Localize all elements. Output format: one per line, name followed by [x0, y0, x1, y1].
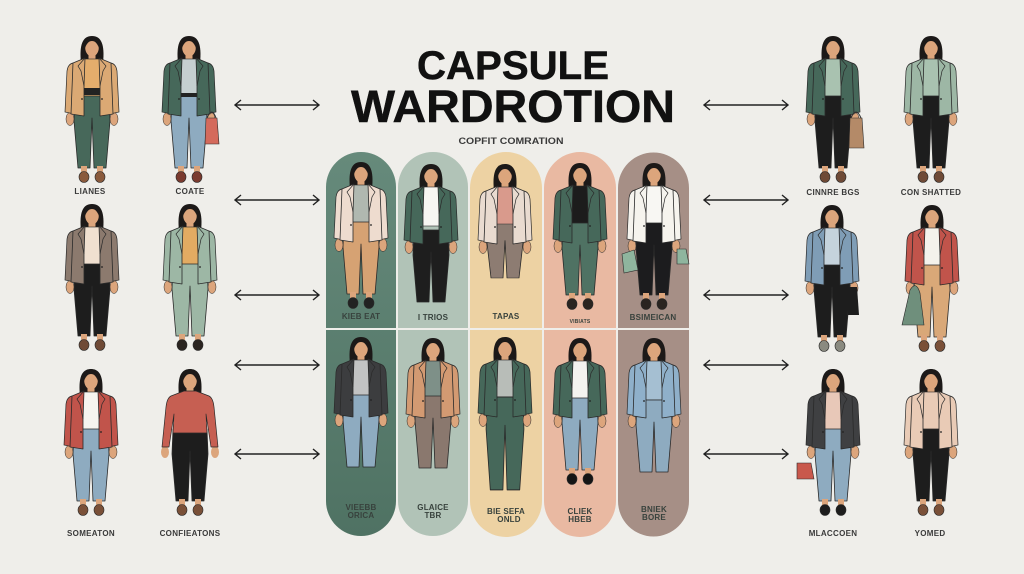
figure: right col 2 row 3 — [904, 369, 958, 516]
figure: left col 2 row 3 — [161, 369, 219, 516]
panel labels: KIEB EAT — [342, 312, 380, 321]
column 2 — [398, 152, 468, 536]
panel labels: CLIEK — [568, 507, 593, 516]
title: WARDROTION — [351, 81, 675, 132]
figure: right col 1 row 2 — [805, 205, 859, 352]
panel labels: TAPAS — [493, 312, 520, 321]
column 3 — [470, 152, 542, 537]
figure: panel 3 top — [478, 164, 532, 278]
figure: panel 5 top — [622, 163, 689, 310]
side labels: YOMED — [915, 529, 945, 538]
figure: panel 2 top — [404, 164, 458, 302]
figure: panel 1 bottom — [334, 337, 388, 467]
icon: small red bag — [797, 463, 814, 479]
side labels: CONFIEATONS — [160, 529, 221, 538]
figure: panel 2 bottom — [406, 338, 460, 468]
figure: right col 1 row 3 — [797, 369, 860, 516]
side labels: LIANES — [74, 187, 106, 196]
panel labels: TBR — [424, 511, 442, 520]
panel labels: ORICA — [348, 511, 374, 520]
icon: bags — [622, 249, 689, 273]
panel labels: BNIEK — [641, 505, 667, 514]
figure: left col 1 row 1 — [65, 36, 119, 182]
side labels: COATE — [176, 187, 205, 196]
panel labels: GLAICE — [417, 503, 449, 512]
panel labels — [342, 312, 676, 524]
panel labels: ONLD — [497, 515, 521, 524]
side labels: CINNRE BGS — [806, 188, 860, 197]
figure: right col 1 row 1 — [806, 36, 864, 182]
icon: green bag — [902, 286, 924, 325]
column 4 — [544, 152, 616, 537]
side labels — [67, 187, 961, 538]
figure: left col 2 row 2 — [163, 204, 217, 350]
figure: panel 5 bottom — [627, 338, 681, 472]
panel labels: BORE — [642, 513, 666, 522]
arrows: right — [704, 100, 788, 459]
panel labels: BIE SEFA — [487, 507, 525, 516]
figure: panel 4 bottom — [553, 338, 607, 484]
side labels: CON SHATTED — [901, 188, 961, 197]
figure: left col 1 row 3 — [64, 369, 118, 516]
panel labels: HBEB — [568, 515, 592, 524]
subtitle: COPFIT COMRATION — [458, 136, 564, 147]
panel labels: BSIMEICAN — [630, 313, 676, 322]
panel: outfit combination columns — [326, 152, 689, 537]
panel labels: I TRIOS — [418, 313, 449, 322]
icon: black bag — [848, 287, 859, 315]
figure: left col 1 row 2 — [65, 204, 119, 350]
side labels: SOMEATON — [67, 529, 115, 538]
panel labels: VIEEBB — [346, 503, 377, 512]
title — [351, 44, 675, 132]
figure: panel 1 top — [334, 162, 388, 308]
title: CAPSULE — [417, 44, 609, 88]
figure: right col 2 row 1 — [904, 36, 958, 182]
icon: brown handbag — [849, 112, 864, 148]
panel labels: VIBIATS — [570, 319, 591, 325]
column 1 — [326, 152, 396, 536]
figure: left col 2 row 1 — [162, 36, 219, 182]
side labels: MLACCOEN — [809, 529, 857, 538]
figure: right col 2 row 2 — [902, 205, 959, 352]
figure: panel 4 top — [553, 163, 607, 310]
icon: red handbag — [205, 112, 219, 144]
column 5 — [618, 152, 689, 536]
arrows: left — [235, 100, 319, 459]
figure: panel 3 bottom — [478, 337, 532, 490]
